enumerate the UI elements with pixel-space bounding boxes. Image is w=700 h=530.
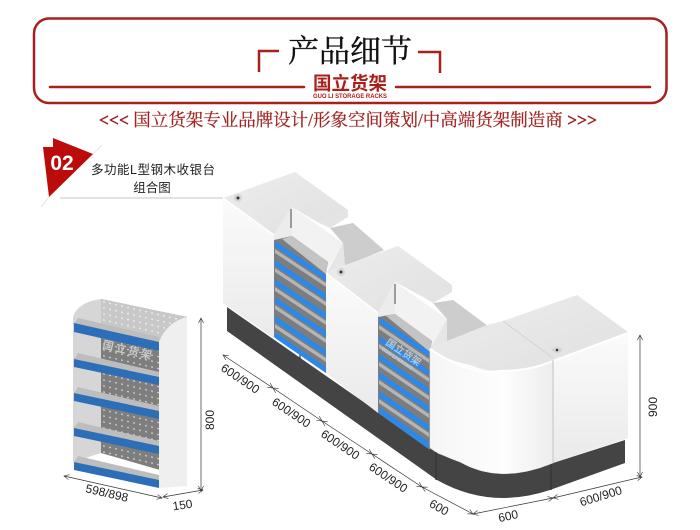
counter: module one (223, 172, 384, 373)
watermark: 国立货架 (383, 336, 424, 369)
header panel (34, 18, 666, 103)
lower step (317, 210, 348, 228)
counter dimensions: 600 (427, 496, 451, 519)
rack dimensions: 598/898 (84, 481, 130, 505)
section caption (91, 162, 215, 195)
title: 产品细节 (288, 34, 412, 69)
counter dimensions: 900 (646, 397, 660, 417)
counter: plinth (227, 307, 625, 498)
rack dimensions (64, 318, 217, 513)
title brackets (259, 51, 440, 73)
rack shelves (74, 318, 159, 488)
lower step (423, 285, 452, 303)
badge number: 02 (50, 152, 74, 175)
tagline: <<< 国立货架专业品牌设计/形象空间策划/中高端货架制造商 >>> (99, 110, 597, 130)
rack left side panel (73, 299, 101, 462)
divider line (50, 86, 650, 88)
counter dimensions: 600/900 (218, 361, 262, 397)
counter dimensions: 600/900 (269, 395, 313, 431)
rack back panel (101, 299, 187, 470)
counter dimensions: 600/900 (318, 427, 362, 463)
counter dimensions: 600/900 (366, 460, 410, 496)
section caption: 组合图 (133, 180, 171, 195)
shelf bay (274, 207, 345, 373)
rack dimensions: 150 (172, 497, 194, 513)
watermark: GUO LI RACKS (380, 346, 414, 372)
small display rack (73, 299, 187, 488)
logo: 国立货架 (313, 73, 387, 94)
shelf bay (378, 282, 447, 450)
counter dimensions: 600/900 (578, 483, 624, 509)
counter dimensions: 600 (497, 507, 520, 525)
rack dimensions: 800 (203, 410, 217, 430)
section badge (41, 138, 223, 207)
counter: corner module (430, 295, 628, 474)
counter dimensions (218, 335, 660, 525)
counter: module two (326, 246, 488, 450)
section caption: 多功能L型钢木收银台 (91, 162, 215, 177)
worktop (326, 246, 452, 313)
logo: GUO LI STORAGE RACKS (313, 93, 388, 100)
rack right side panel (159, 317, 187, 488)
rack watermark: 国立货架 (101, 337, 153, 362)
worktop (223, 172, 348, 235)
